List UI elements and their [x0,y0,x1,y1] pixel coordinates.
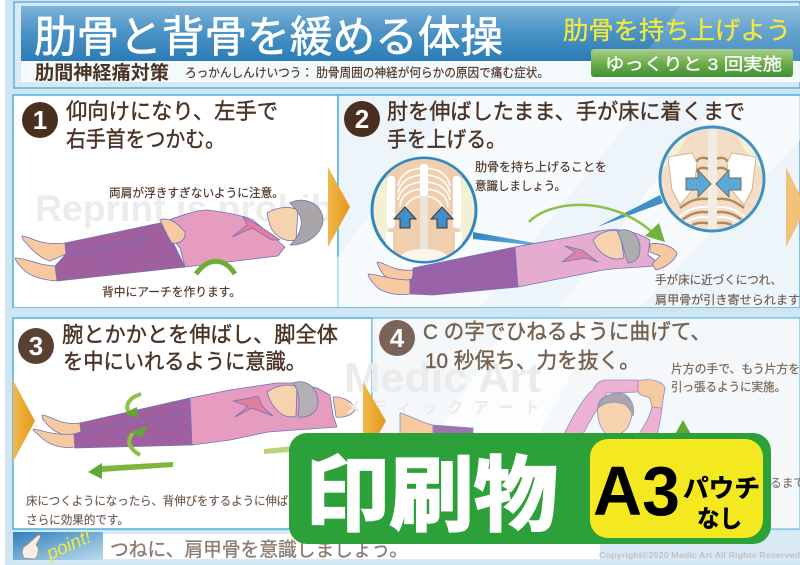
step number 1: 1 [33,105,47,135]
note: pull with one hand: 引っ張るように実施。 [671,380,786,394]
arrow: rotate down [124,394,141,418]
watermark: Medic Art: Medic Art [344,354,541,401]
point bar [13,526,800,565]
step 3 heading: を中にいれるように意識。 [63,350,306,374]
step 2 heading: 手を上げる。 [387,128,506,152]
step number 4 [379,320,415,356]
note: pull with one hand: 片方の手で、もう片方を [671,362,800,376]
note: shoulder blades [655,273,800,307]
step 4 heading: C の字でひねるように曲げて、 [423,320,711,344]
arrow inward right [716,170,741,197]
label: printed matter: 印刷物 [305,451,558,542]
step 3 heading: 腕とかかとを伸ばし、脚全体 [62,323,338,347]
note: shoulder blades: 肩甲骨が引き寄せられます [655,293,800,307]
step 1 heading: 右手首をつかむ。 [66,127,225,152]
panel 2 [300,95,800,308]
note: arch: 背中にアーチを作ります。 [102,285,241,299]
figure: heel stretch [33,382,355,448]
step number 3 [18,328,54,364]
copyright: Copyright©2020 Medic Art All Rights Reserved [599,551,800,560]
note: lift ribs: 肋骨を持ち上げることを [475,160,607,174]
arrow: step 4 pointer [363,382,386,462]
definition text: ろっかんしんけいつう： 肋骨周囲の神経が何らかの原因で痛む症状。 [185,65,549,80]
subheading: 肋間神経痛対策 [35,61,169,84]
step number 2: 2 [355,104,369,134]
note: back stretch [26,494,311,527]
arrow: step 3 pointer [13,380,35,462]
yellow size panel: パウチ [683,475,760,503]
step number 1 [22,102,58,138]
arrow: green tip [674,420,692,436]
label: point: point! [43,526,95,565]
badge: three repetitions [591,49,793,77]
note: lift ribs: 意識しましょう。 [475,180,566,193]
arrow: rotate up [129,426,148,455]
arrow: step 2 to 3 [786,167,800,247]
yellow size panel [590,439,763,538]
panel 3 [13,318,372,529]
arrow inward left [686,170,711,197]
curved motion arrow [529,205,665,242]
figure: side bend [400,380,665,436]
lens pointers [473,195,663,249]
step number 2 [344,101,380,137]
arrow: heels pull [88,462,173,479]
point message: つねに、肩甲骨を意識しましょう。 [110,539,408,561]
skeleton lens: back ribs [660,127,764,232]
arrow: arms pull [264,445,304,454]
watermark: Medic Art: メディックアート [345,398,540,417]
icon: pointing finger [22,535,40,559]
step 3 heading [62,323,338,374]
note: lift ribs [475,160,607,193]
step 4 heading: 10 秒保ち、力を抜く。 [425,349,640,373]
panel 1 [13,95,400,308]
arrow up right [431,207,453,228]
step 1 heading [66,99,278,152]
step 4 heading [423,320,711,373]
note: back stretch: 床につくようになったら、背伸びをするように伸ばすと [26,494,311,508]
title: 肋骨と背骨を緩める体操 [34,14,503,62]
figure: arms overhead [368,230,677,295]
step 2 heading [387,100,745,152]
panel 4 [344,318,800,529]
step 1 heading: 仰向けになり、左手で [66,99,278,124]
arch arrow [196,261,235,274]
header banner [14,2,800,88]
watermark: reprint: Reprint is prohibited [35,188,400,229]
subtitle: lift ribs: 肋骨を持ち上げよう [563,17,791,45]
badge: three repetitions: ゆっくりと 3 回実施 [605,55,782,74]
arrow up left [394,207,416,228]
note: pull with one hand [671,362,800,394]
note: shoulders: 両肩が浮きすぎないように注意。 [109,186,284,200]
skeleton lens: front ribs [372,158,476,267]
step number 4: 4 [390,323,405,353]
note: back stretch: さらに効果的です。 [26,513,129,527]
yellow size panel: A3 [593,452,680,530]
yellow size panel: なし [697,506,742,533]
product badge: printed A3 no pouch [289,433,771,544]
step number 3: 3 [29,331,43,361]
figure: supine with wrist held [15,200,323,281]
note: shoulder blades: 手が床に近づくにつれ、 [655,273,782,287]
divider band [5,308,800,318]
arrow: step 1 to 2 [328,167,350,247]
step 2 heading: 肘を伸ばしたまま、手が床に着くまで [387,100,745,124]
